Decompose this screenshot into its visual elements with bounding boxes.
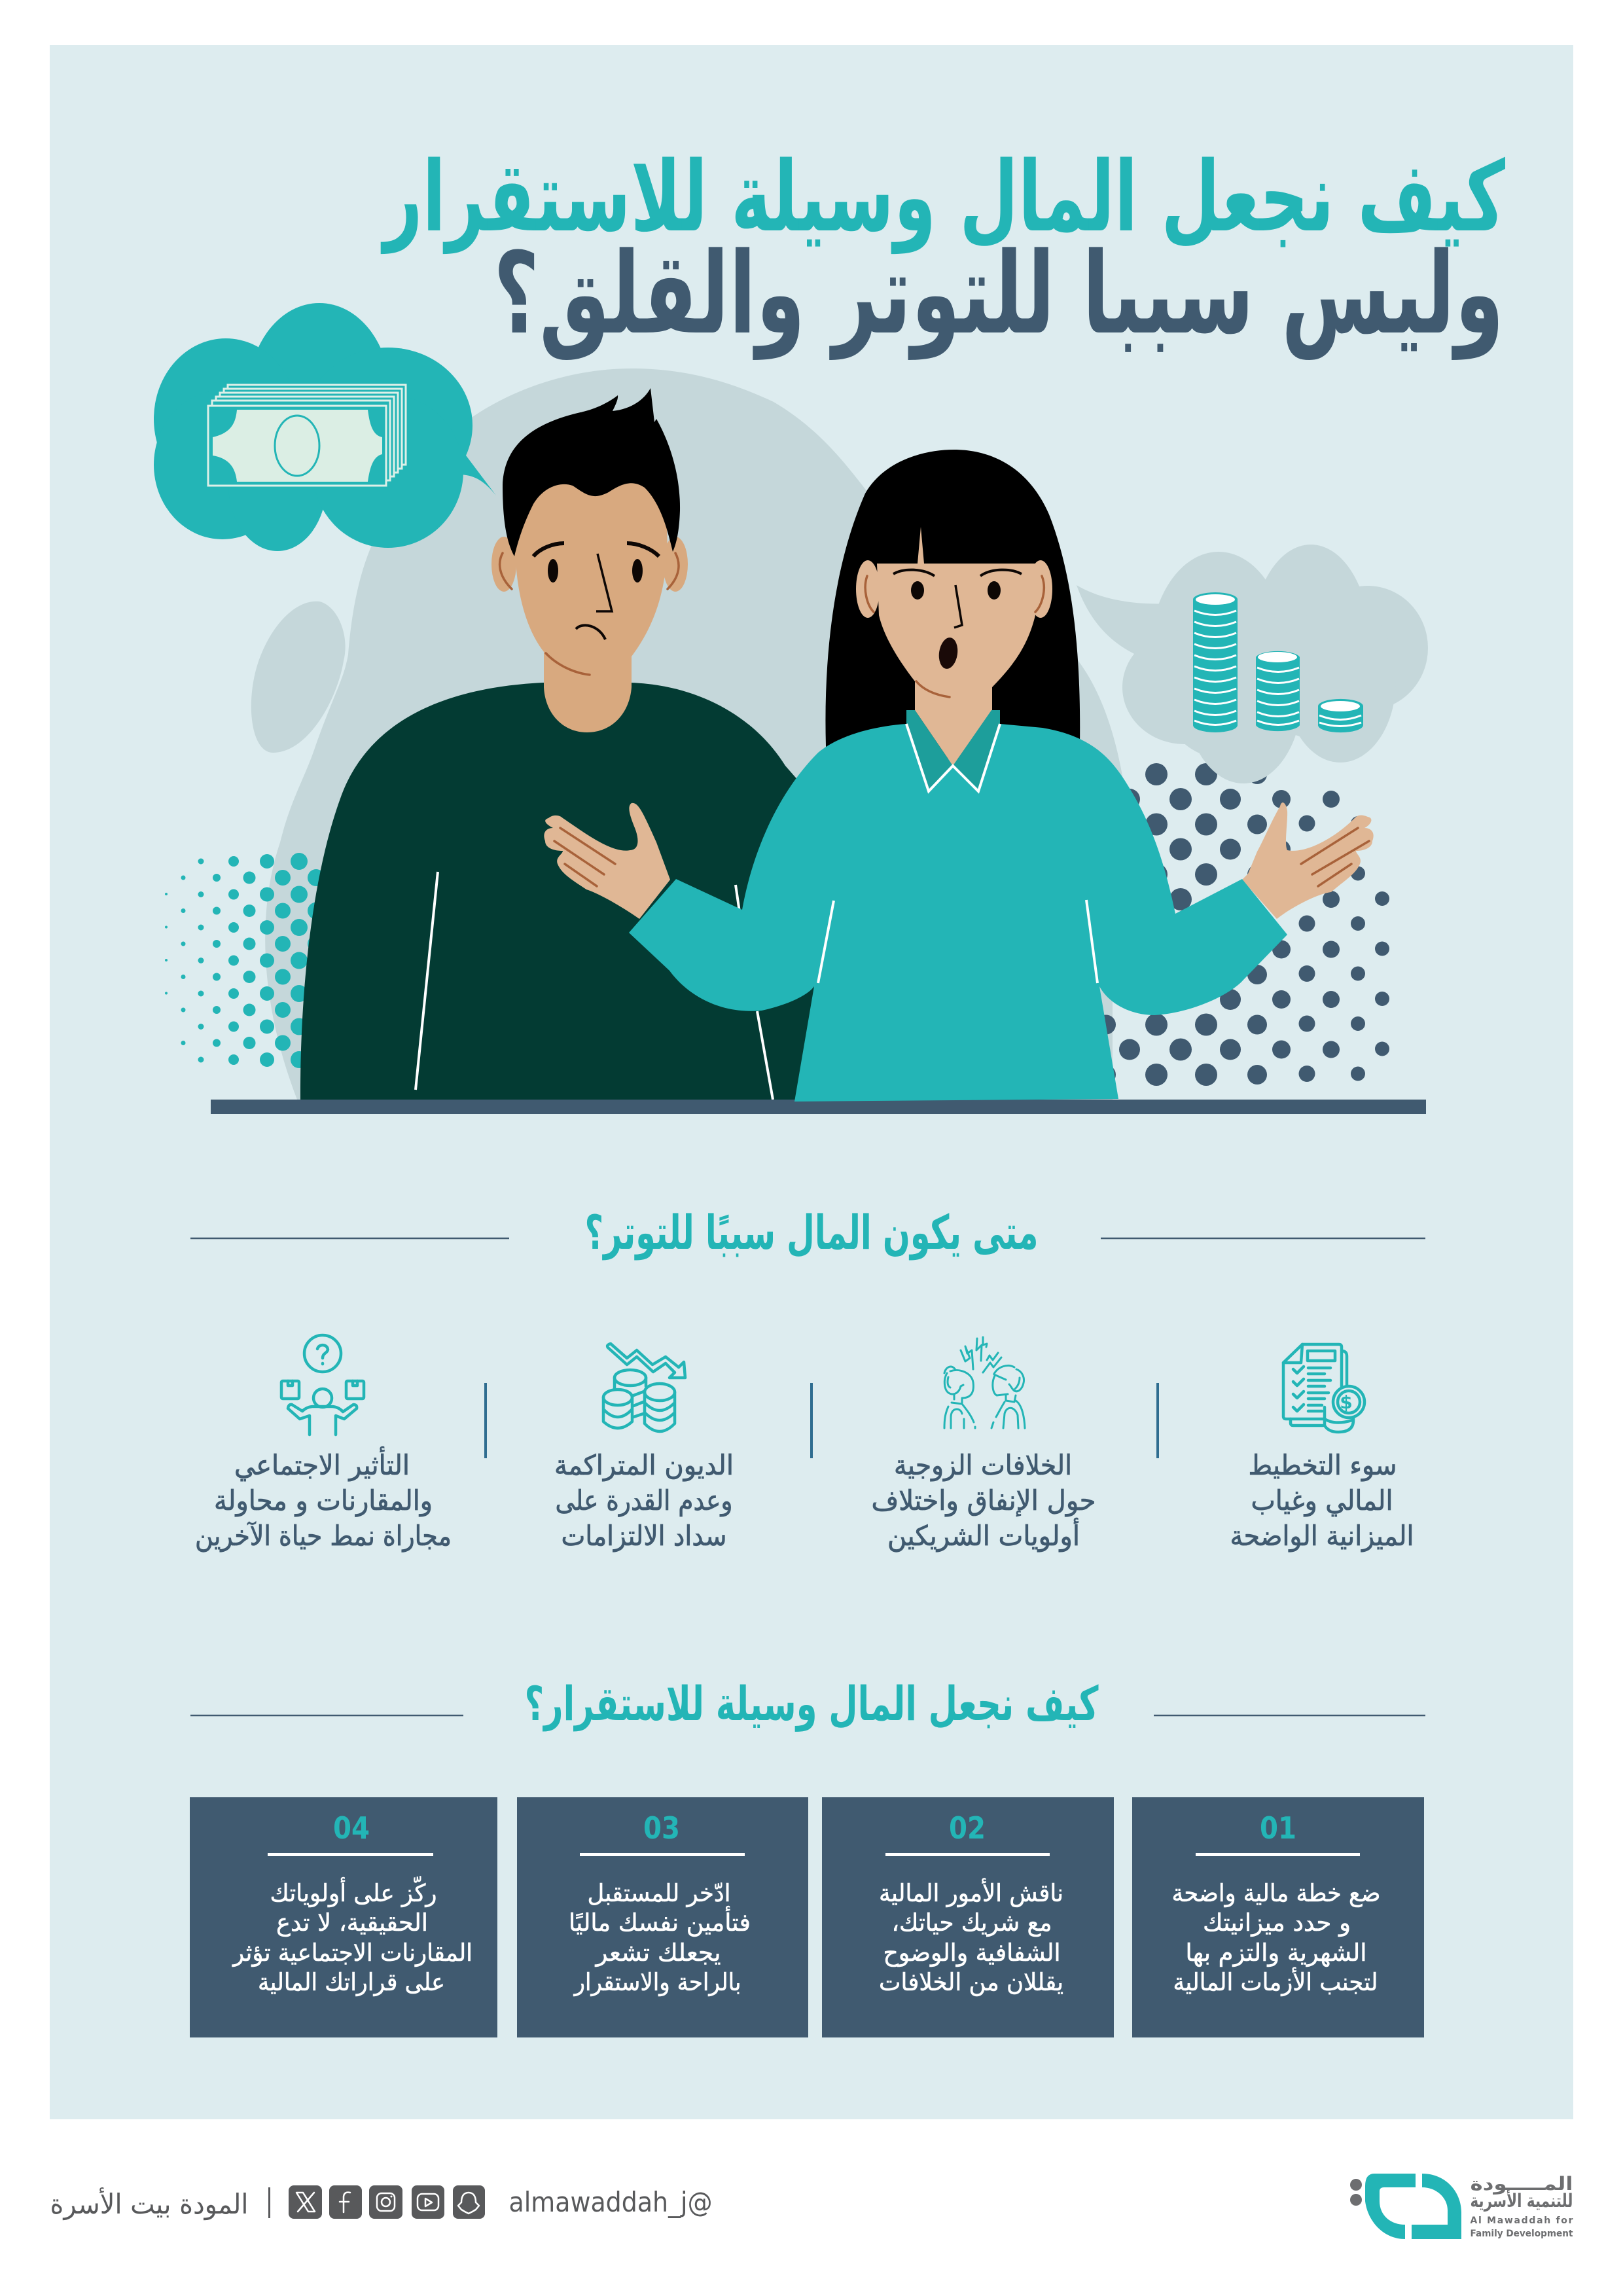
card 02 xyxy=(822,1797,1114,2037)
card background xyxy=(190,1797,497,2037)
woman figure xyxy=(544,450,1374,1102)
woman sweater xyxy=(629,724,1287,1102)
text block: مجاراة نمط حياة الآخرين xyxy=(195,1520,452,1552)
collar white outline xyxy=(906,724,1000,791)
text block xyxy=(1230,1449,1414,1552)
card text: ضع خطة مالية واضحة xyxy=(1171,1879,1381,1907)
card number: 04 xyxy=(333,1810,370,1846)
icon: facebook xyxy=(329,2185,362,2219)
card text: الحقيقية، لا تدع xyxy=(276,1909,428,1937)
card background xyxy=(1132,1797,1424,2037)
card text: الشفافية والوضوح xyxy=(883,1939,1060,1967)
teal dots pattern xyxy=(166,861,316,1073)
logo dots xyxy=(1350,2179,1362,2191)
woman right hand xyxy=(1242,802,1374,919)
coin stack tall xyxy=(1193,592,1238,732)
man skin lines xyxy=(500,553,679,675)
handle: almawaddah_j@ xyxy=(509,2186,712,2218)
illustration: couple worried about money xyxy=(154,303,1428,1114)
thought cloud: coin stacks xyxy=(1077,545,1428,783)
man mouth xyxy=(576,625,605,639)
card text: ناقش الأمور المالية xyxy=(879,1878,1063,1907)
card text: و حدد ميزانيتك xyxy=(1203,1909,1351,1937)
man eyebrows xyxy=(533,543,659,556)
card text xyxy=(879,1878,1063,1996)
text block xyxy=(195,1446,452,1552)
card underline xyxy=(885,1853,1050,1856)
card text: فتأمين نفسك ماليًا xyxy=(569,1906,751,1937)
text block xyxy=(872,1449,1096,1552)
heading rule left xyxy=(190,1238,509,1239)
man hair xyxy=(503,388,680,556)
sweater seams xyxy=(416,872,773,1100)
woman left hand xyxy=(544,803,670,919)
icon: document and coins xyxy=(1283,1344,1364,1432)
icon: coin stacks and falling arrow xyxy=(603,1344,685,1431)
heading rule left xyxy=(190,1715,463,1716)
icon: instagram xyxy=(369,2185,402,2219)
card text: يجعلك تشعر xyxy=(594,1939,721,1967)
separator xyxy=(268,2187,270,2218)
woman ears xyxy=(856,560,880,618)
man figure xyxy=(300,388,831,1101)
icon: youtube xyxy=(412,2185,444,2219)
woman hair xyxy=(825,450,1080,759)
icon: X xyxy=(289,2185,322,2219)
card text xyxy=(1171,1879,1381,1996)
card number: 03 xyxy=(643,1810,680,1846)
icon: person weighing boxes with question mark xyxy=(281,1335,364,1435)
text block: الميزانية الواضحة xyxy=(1230,1520,1414,1552)
icon: snapchat xyxy=(453,2185,485,2219)
card text: ادّخر للمستقبل xyxy=(588,1879,730,1907)
text block: وعدم القدرة على xyxy=(555,1484,733,1516)
icon: arguing couple xyxy=(944,1337,1025,1428)
text block: حول الإنفاق واختلاف xyxy=(872,1484,1096,1516)
background grey blob xyxy=(265,368,1131,1100)
teal cloud shape xyxy=(154,303,496,551)
text block: أولويات الشريكين xyxy=(887,1518,1080,1552)
card background xyxy=(517,1797,808,2037)
woman nose xyxy=(954,585,962,628)
card number: 02 xyxy=(949,1810,986,1846)
man neck and face xyxy=(515,478,668,732)
text block: الخلافات الزوجية xyxy=(894,1449,1072,1481)
card text: ركّز على أولوياتك xyxy=(270,1876,437,1907)
column dividers xyxy=(486,1383,1158,1458)
footer: logo: للتنمية الأسرية xyxy=(1470,2189,1573,2212)
card text: لتجنب الأزمات المالية xyxy=(1173,1967,1378,1996)
card number: 01 xyxy=(1260,1810,1296,1846)
card text: المقارنات الاجتماعية تؤثر xyxy=(232,1939,473,1967)
card text: بالراحة والاستقرار xyxy=(573,1968,741,1996)
logo english name: Al Mawaddah for xyxy=(1470,2215,1573,2226)
man ears xyxy=(491,537,516,592)
heading text: كيف نجعل المال وسيلة للاستقرار؟ xyxy=(525,1676,1099,1732)
table top xyxy=(211,1100,1426,1114)
card 03 xyxy=(517,1797,808,2037)
card text xyxy=(569,1879,751,1996)
item 1: poor planning xyxy=(1230,1344,1414,1552)
card text: على قراراتك المالية xyxy=(258,1968,445,1996)
coin stack medium xyxy=(1256,651,1300,731)
card text: يقللان من الخلافات xyxy=(879,1968,1063,1996)
card text: مع شريك حياتك، xyxy=(891,1909,1052,1937)
heading text: متى يكون المال سببًا للتوتر؟ xyxy=(585,1205,1038,1261)
item 3: accumulated debts xyxy=(554,1344,734,1552)
footer: logo xyxy=(1350,2173,1573,2239)
grey cloud shape xyxy=(1077,545,1428,783)
banknote face xyxy=(213,410,382,482)
text block: والمقارنات و محاولة xyxy=(214,1484,433,1516)
card text: الشهرية والتزم بها xyxy=(1186,1939,1366,1967)
card underline xyxy=(1196,1853,1360,1856)
card 01 xyxy=(1132,1797,1424,2037)
grey oval xyxy=(251,601,346,753)
text block: المالي وغياب xyxy=(1251,1484,1393,1517)
heading rule right xyxy=(1101,1238,1425,1239)
card text xyxy=(232,1876,473,1996)
woman mouth xyxy=(937,636,959,670)
item 2: marital disputes xyxy=(872,1337,1096,1552)
woman eyebrows xyxy=(893,570,1022,576)
footer: logo: Family Development xyxy=(1470,2229,1573,2239)
hand finger lines xyxy=(554,828,1369,886)
sweater seams xyxy=(818,900,1097,983)
logo arabic name: المـــــودة xyxy=(1470,2173,1573,2195)
footer: social handle and slogan xyxy=(50,2185,712,2220)
woman skin lines xyxy=(865,576,1044,697)
item 4: social influence xyxy=(195,1335,452,1552)
heading rule right xyxy=(1154,1715,1425,1716)
navy dots pattern xyxy=(1106,774,1382,1086)
banknote stack xyxy=(208,385,406,486)
woman face and neck xyxy=(877,527,1038,766)
card underline xyxy=(268,1853,433,1856)
title xyxy=(380,141,1506,361)
icon dollar sign: $ xyxy=(1340,1391,1353,1413)
card underline xyxy=(580,1853,745,1856)
thought cloud: banknotes xyxy=(154,303,496,551)
collar dark fill xyxy=(906,710,1000,789)
woman eyes xyxy=(911,581,924,600)
text block: سوء التخطيط xyxy=(1249,1449,1397,1481)
man nose xyxy=(596,554,612,611)
card background xyxy=(822,1797,1114,2037)
logo mark xyxy=(1365,2174,1461,2239)
man eyes xyxy=(548,559,558,583)
coin stack small xyxy=(1318,699,1363,732)
slogan: المودة بيت الأسرة xyxy=(50,2187,249,2220)
text block: سداد الالتزامات xyxy=(562,1520,726,1552)
text block: الديون المتراكمة xyxy=(554,1449,734,1481)
man sweater xyxy=(300,683,831,1101)
card 04 xyxy=(190,1797,497,2037)
text block: التأثير الاجتماعي xyxy=(234,1446,410,1482)
text block xyxy=(554,1449,734,1552)
